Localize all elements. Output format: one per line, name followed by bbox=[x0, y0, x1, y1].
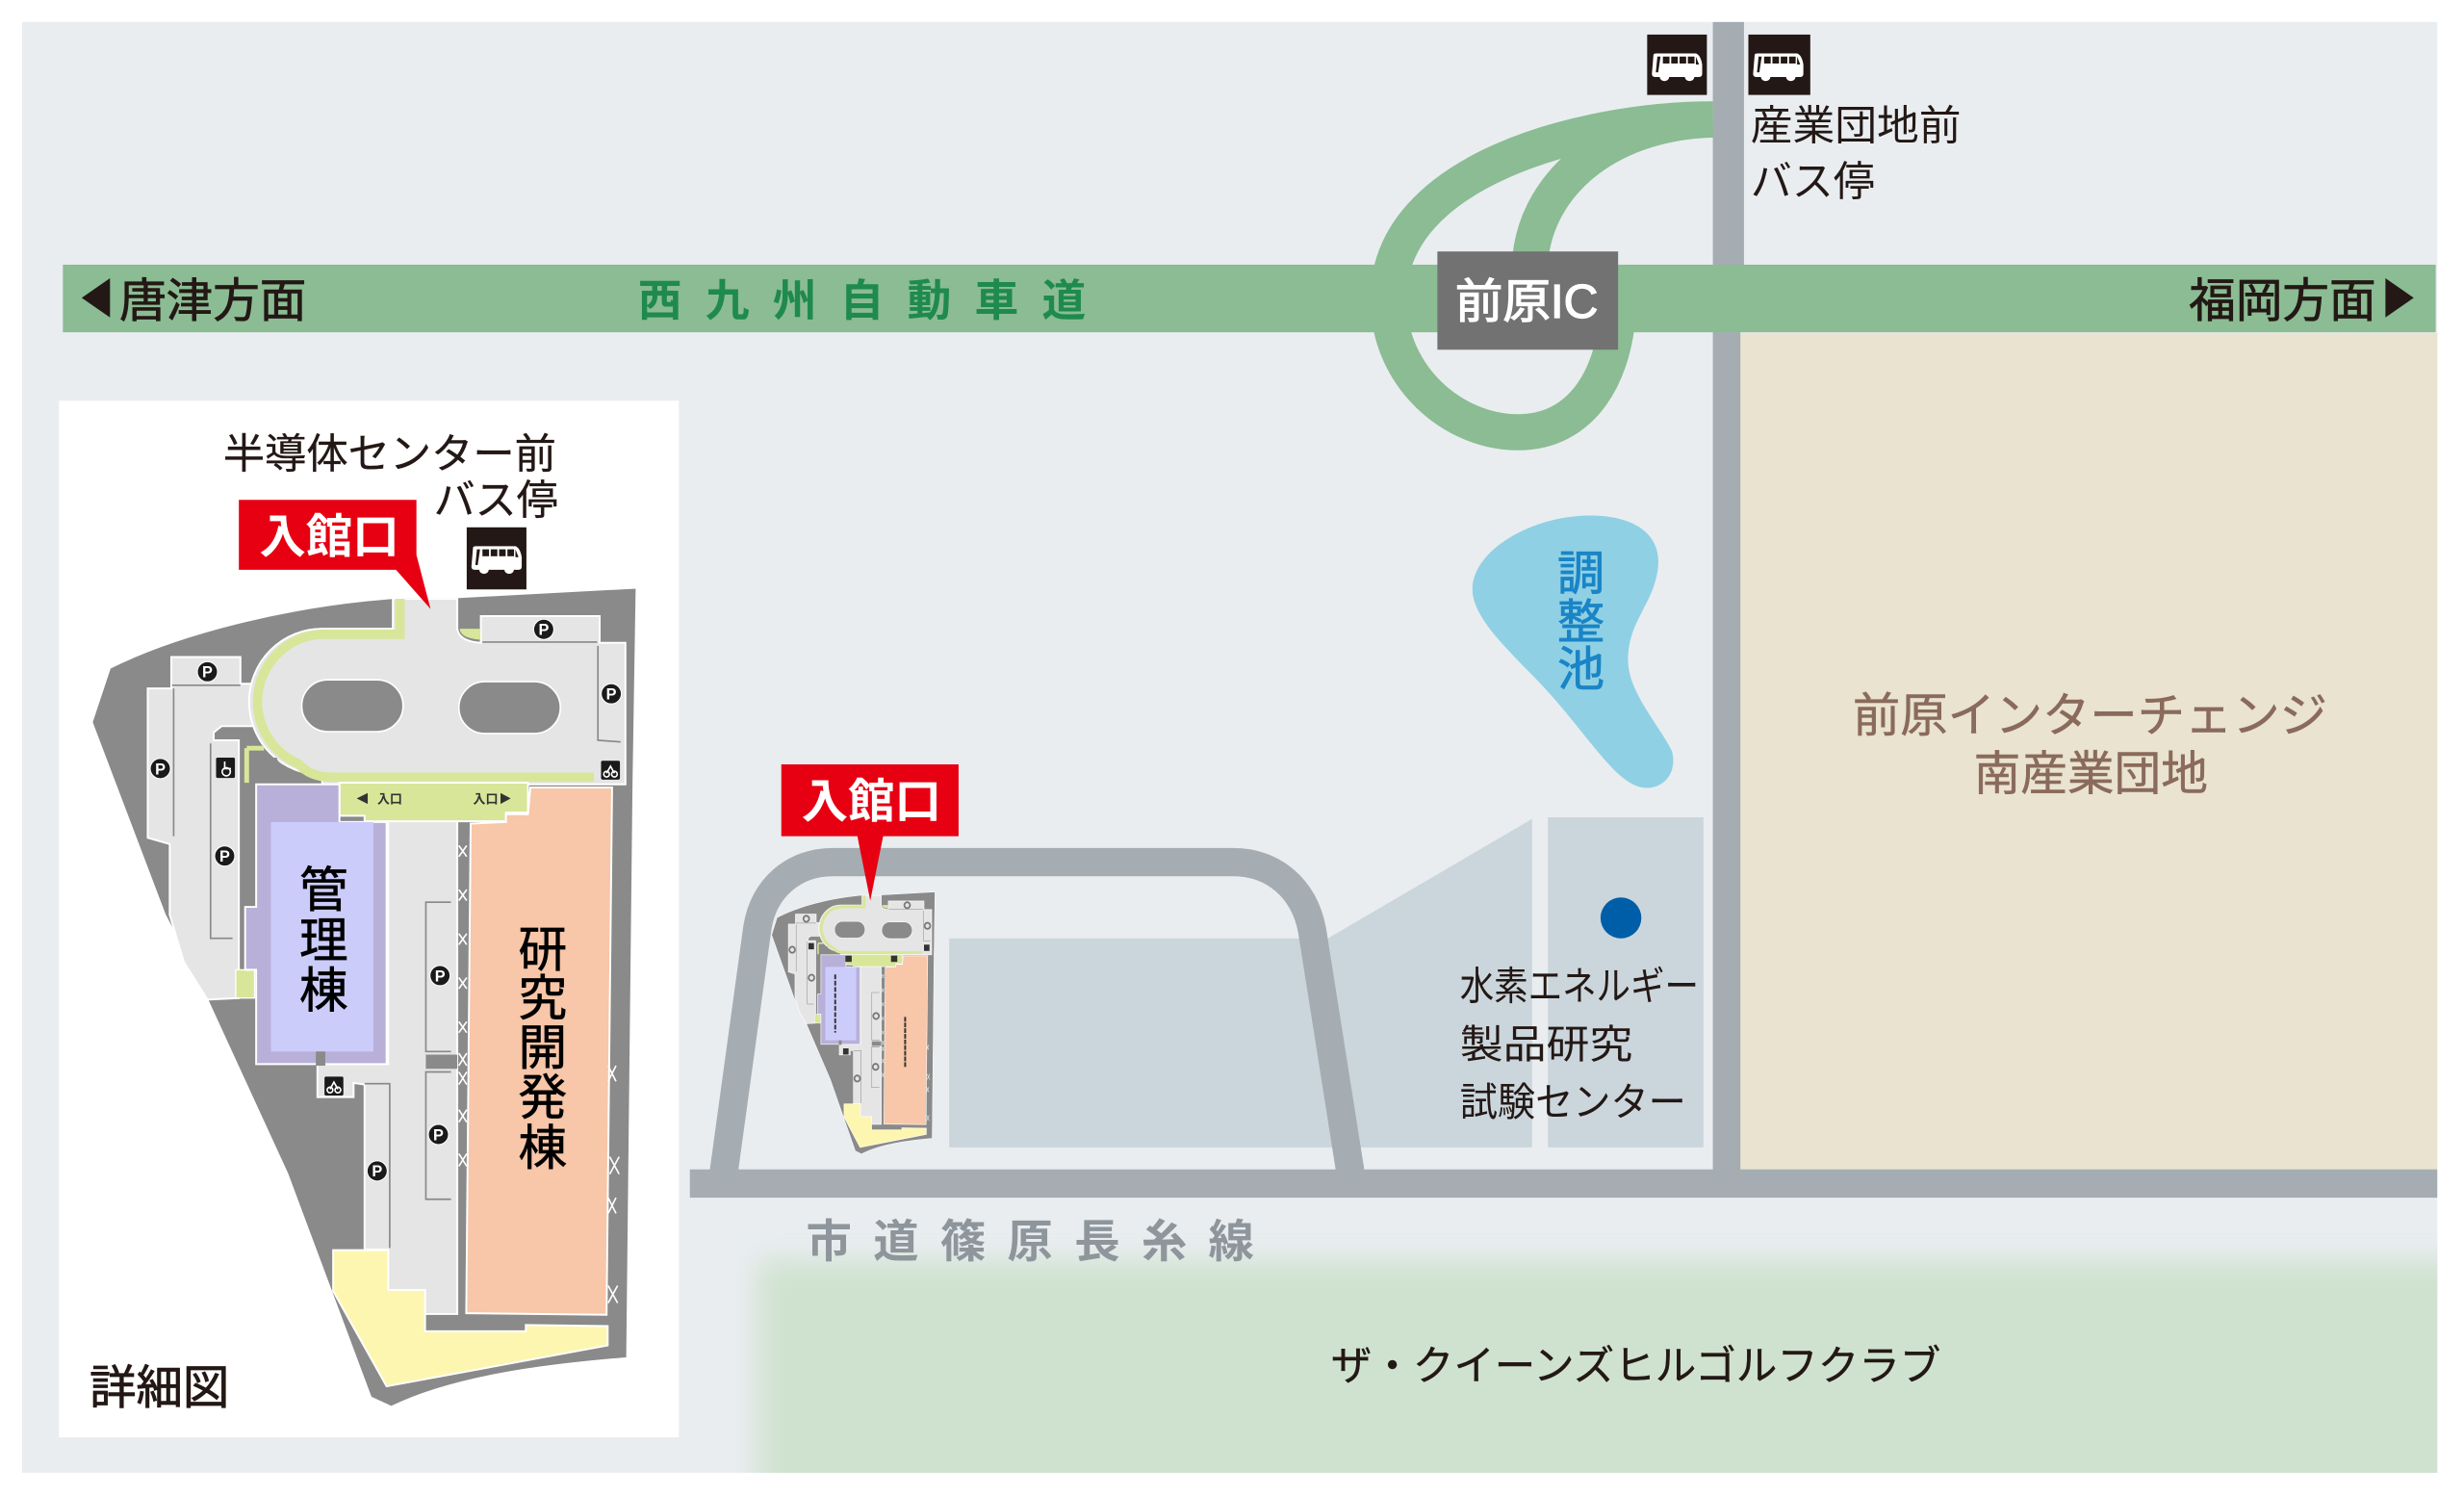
detail bus stop label: バス停 bbox=[434, 478, 558, 525]
mini site plan bbox=[772, 892, 935, 1154]
left parking road bbox=[147, 657, 253, 999]
callout: entrance on detail map bbox=[239, 500, 430, 609]
pond label: 整 bbox=[1557, 597, 1604, 649]
hydrogen test centre label: 水素エネルギー bbox=[1460, 964, 1699, 1008]
regulating pond bbox=[1473, 516, 1673, 787]
industrial park area bbox=[1740, 333, 2437, 1171]
direction label: Karatsu: 唐津方面 bbox=[119, 275, 306, 327]
centre road bbox=[318, 817, 457, 1314]
parking letters bbox=[155, 622, 617, 1180]
golf course label: ザ・クイーンズヒルゴルフクラブ bbox=[1331, 1344, 1940, 1389]
label: management building bbox=[299, 863, 348, 1019]
label: R&D building: 究 bbox=[518, 971, 567, 1026]
parking letters: P bbox=[435, 967, 446, 985]
label: R&D building bbox=[518, 922, 567, 1175]
parking letters: P bbox=[219, 848, 230, 865]
parking letters: P bbox=[202, 664, 213, 682]
hydrogen test centre label: 製品研究 bbox=[1460, 1022, 1632, 1067]
panel: detail map bbox=[59, 400, 679, 1437]
stair marks bbox=[459, 845, 619, 1303]
detail map caption: 詳細図 bbox=[90, 1362, 229, 1414]
golf course area bbox=[757, 1260, 2464, 1496]
label: R&D building: 研 bbox=[518, 922, 567, 977]
plaza entrance labels: 入口 bbox=[473, 791, 499, 806]
entrance plaza bbox=[340, 783, 528, 821]
parking letters: P bbox=[433, 1126, 444, 1144]
label: R&D building: 発 bbox=[518, 1070, 567, 1125]
green walkway bbox=[258, 599, 594, 777]
industrial park label: 南産業団地 bbox=[1974, 748, 2208, 800]
interchange label box: 前原IC bbox=[1455, 276, 1598, 328]
yellow yard bbox=[333, 1251, 607, 1386]
expressway name: 西九州自動車道 bbox=[638, 276, 1086, 325]
icon: bus stop west bbox=[1647, 35, 1707, 95]
roundabout islands bbox=[301, 680, 403, 732]
parking markers bbox=[150, 619, 622, 1181]
hydrogen test centre label bbox=[1460, 964, 1699, 1124]
callout: entrance on detail map: 入館口 bbox=[259, 511, 399, 563]
label: R&D building: 開 bbox=[518, 1020, 567, 1075]
label: management building: 棟 bbox=[299, 964, 348, 1019]
management building bbox=[245, 785, 387, 1064]
expressway band bbox=[63, 265, 2436, 332]
detail bus stop label bbox=[223, 432, 558, 525]
direction label: Fukuoka: 福岡方面 bbox=[2189, 275, 2376, 327]
label: management building: 理 bbox=[299, 913, 348, 967]
centre parking bays bbox=[365, 902, 451, 1248]
icon: bus stop east bbox=[1748, 35, 1810, 95]
site plan bbox=[92, 588, 636, 1406]
parking letters: P bbox=[606, 686, 617, 704]
plaza entrance labels bbox=[357, 791, 511, 806]
loop parking lines bbox=[482, 642, 621, 742]
hydrogen test centre grounds bbox=[949, 817, 1704, 1148]
pond label: 調 bbox=[1557, 548, 1604, 600]
bus stop label: バス停 bbox=[1751, 159, 1875, 205]
accessibility and bicycle markers bbox=[216, 758, 620, 1096]
detail bus stop label: 半導体センター前 bbox=[223, 432, 556, 478]
plaza entrance labels: 入口 bbox=[377, 791, 402, 806]
parking letters: P bbox=[538, 622, 549, 639]
label: R&D building: 棟 bbox=[518, 1121, 567, 1175]
vertical road bbox=[1713, 22, 1744, 1179]
label: management building: 管 bbox=[299, 863, 348, 917]
parking letters: P bbox=[155, 761, 166, 778]
city road 市道篠原長糸線 bbox=[690, 1170, 2437, 1198]
entrance loop road bbox=[249, 599, 626, 785]
industrial park label: 前原インターチェンジ bbox=[1853, 690, 2327, 742]
hydrogen test centre label: 試験センター bbox=[1460, 1080, 1686, 1124]
bus stop label: 産業団地前 bbox=[1751, 103, 1962, 149]
parking letters: P bbox=[372, 1163, 382, 1180]
callout: entrance on main map bbox=[782, 764, 959, 901]
interchange ramps bbox=[1388, 119, 1713, 432]
interchange label box bbox=[1437, 251, 1618, 349]
marker: hydrogen test centre bbox=[1601, 897, 1641, 939]
loop access road bbox=[723, 863, 1351, 1179]
industrial park label bbox=[1853, 690, 2327, 800]
pond label bbox=[1557, 548, 1604, 696]
bus stop label bbox=[1751, 103, 1962, 205]
parking bay lines left bbox=[172, 685, 241, 939]
callout: entrance on main map: 入館口 bbox=[802, 776, 941, 828]
R&D building bbox=[466, 787, 612, 1315]
icon: detail bus stop bbox=[467, 528, 526, 589]
site base bbox=[92, 588, 636, 1406]
city road label: 市道篠原長糸線 bbox=[807, 1217, 1254, 1268]
pond label: 池 bbox=[1557, 644, 1604, 696]
